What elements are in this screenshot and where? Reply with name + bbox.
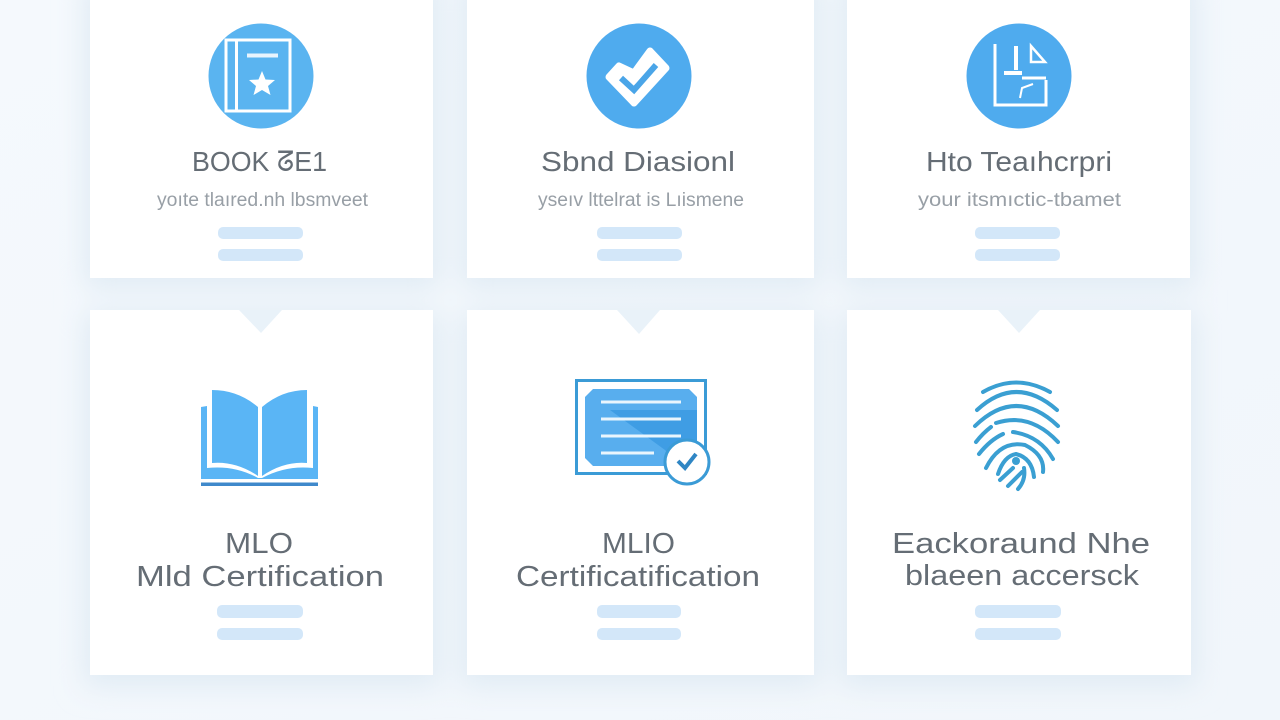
heading: MLO certification: MLO xyxy=(225,528,293,560)
heading: certificate: MLIO xyxy=(602,528,675,560)
placeholder bars xyxy=(597,227,682,261)
panel: book set xyxy=(90,0,433,278)
text: book set description: yoıte tlaıred.nh lbsmveet xyxy=(157,190,369,211)
text: send decision description: yseıv lttelrat is Lıismene xyxy=(538,190,744,211)
placeholder bars xyxy=(597,605,681,640)
icon: certificate with check seal xyxy=(576,380,709,484)
heading: book set: BOOK ᘔE1 xyxy=(192,146,327,177)
heading: background check xyxy=(892,528,1150,592)
icon: book with star xyxy=(208,24,314,128)
heading: certificate: Certificatification xyxy=(516,561,760,593)
placeholder bars xyxy=(975,605,1061,640)
icon: drafting plan xyxy=(966,24,1072,128)
notch xyxy=(239,310,282,333)
placeholder bars xyxy=(975,227,1060,261)
heading: certificate xyxy=(516,528,760,593)
heading: background check: Eackoraund Nhe xyxy=(892,528,1150,560)
heading: background check: blaeen accersck xyxy=(905,560,1140,592)
panel: background check xyxy=(847,310,1191,675)
notch xyxy=(998,310,1040,333)
panel: MLO certification xyxy=(90,310,433,675)
heading: send decision: Sbnd Diasionl xyxy=(541,146,735,177)
heading: MLO certification xyxy=(136,528,384,593)
icon: fingerprint xyxy=(975,382,1058,489)
panel: certificate xyxy=(467,310,814,675)
heading: MLO certification: Mld Certification xyxy=(136,561,384,593)
panel: teaching template xyxy=(847,0,1190,278)
panel: send decision xyxy=(467,0,814,278)
placeholder bars xyxy=(217,605,303,640)
notch xyxy=(617,310,660,334)
heading: teaching template: Hto Teaıhcrpri xyxy=(926,146,1112,177)
text: teaching template description: your itsmıctic-tbamet xyxy=(918,190,1122,211)
icon: open book xyxy=(201,390,318,486)
placeholder bars xyxy=(218,227,303,261)
icon: check badge xyxy=(586,24,692,128)
